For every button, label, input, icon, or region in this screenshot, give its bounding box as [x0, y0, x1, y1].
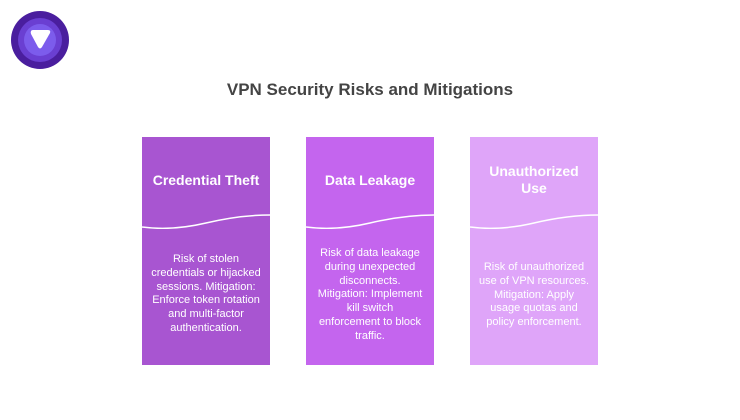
- panel: data leakage: Mitigation: Implement: [318, 288, 422, 300]
- panel: credential theft: authentication.: [170, 322, 242, 334]
- panel: credential theft: [142, 137, 270, 365]
- title: VPN Security Risks and Mitigations: [227, 80, 513, 99]
- panel: data leakage: kill switch: [347, 302, 393, 314]
- panel: unauthorized use: use of VPN resources.: [479, 275, 589, 287]
- panel: data leakage: [306, 137, 434, 365]
- panel: unauthorized use: Risk of unauthorized: [484, 261, 584, 273]
- panel: data leakage: Risk of data leakage: [320, 247, 420, 259]
- panel: data leakage: traffic.: [355, 330, 385, 342]
- panel: data leakage: Data Leakage: [325, 172, 415, 188]
- panel: credential theft: Risk of stolen: [173, 253, 239, 265]
- panel: unauthorized use: Unauthorized: [489, 163, 579, 179]
- panel: unauthorized use: Use: [521, 180, 547, 196]
- panel: credential theft: Credential Theft: [153, 172, 259, 188]
- panel: credential theft: credentials or hijacked: [151, 267, 261, 279]
- panel: data leakage: during unexpected: [325, 261, 415, 273]
- panel: unauthorized use: policy enforcement.: [486, 316, 582, 328]
- panel: credential theft: and multi-factor: [168, 308, 244, 320]
- panel: credential theft: Enforce token rotation: [152, 294, 260, 306]
- panel: data leakage: disconnects.: [339, 275, 401, 287]
- panel: data leakage: enforcement to block: [319, 316, 421, 328]
- panel: unauthorized use: usage quotas and: [490, 302, 578, 314]
- icon: logo: [11, 11, 69, 69]
- panel: unauthorized use: Mitigation: Apply: [494, 289, 574, 301]
- panel: credential theft: sessions. Mitigation:: [156, 281, 256, 293]
- panel: unauthorized use: [470, 137, 598, 365]
